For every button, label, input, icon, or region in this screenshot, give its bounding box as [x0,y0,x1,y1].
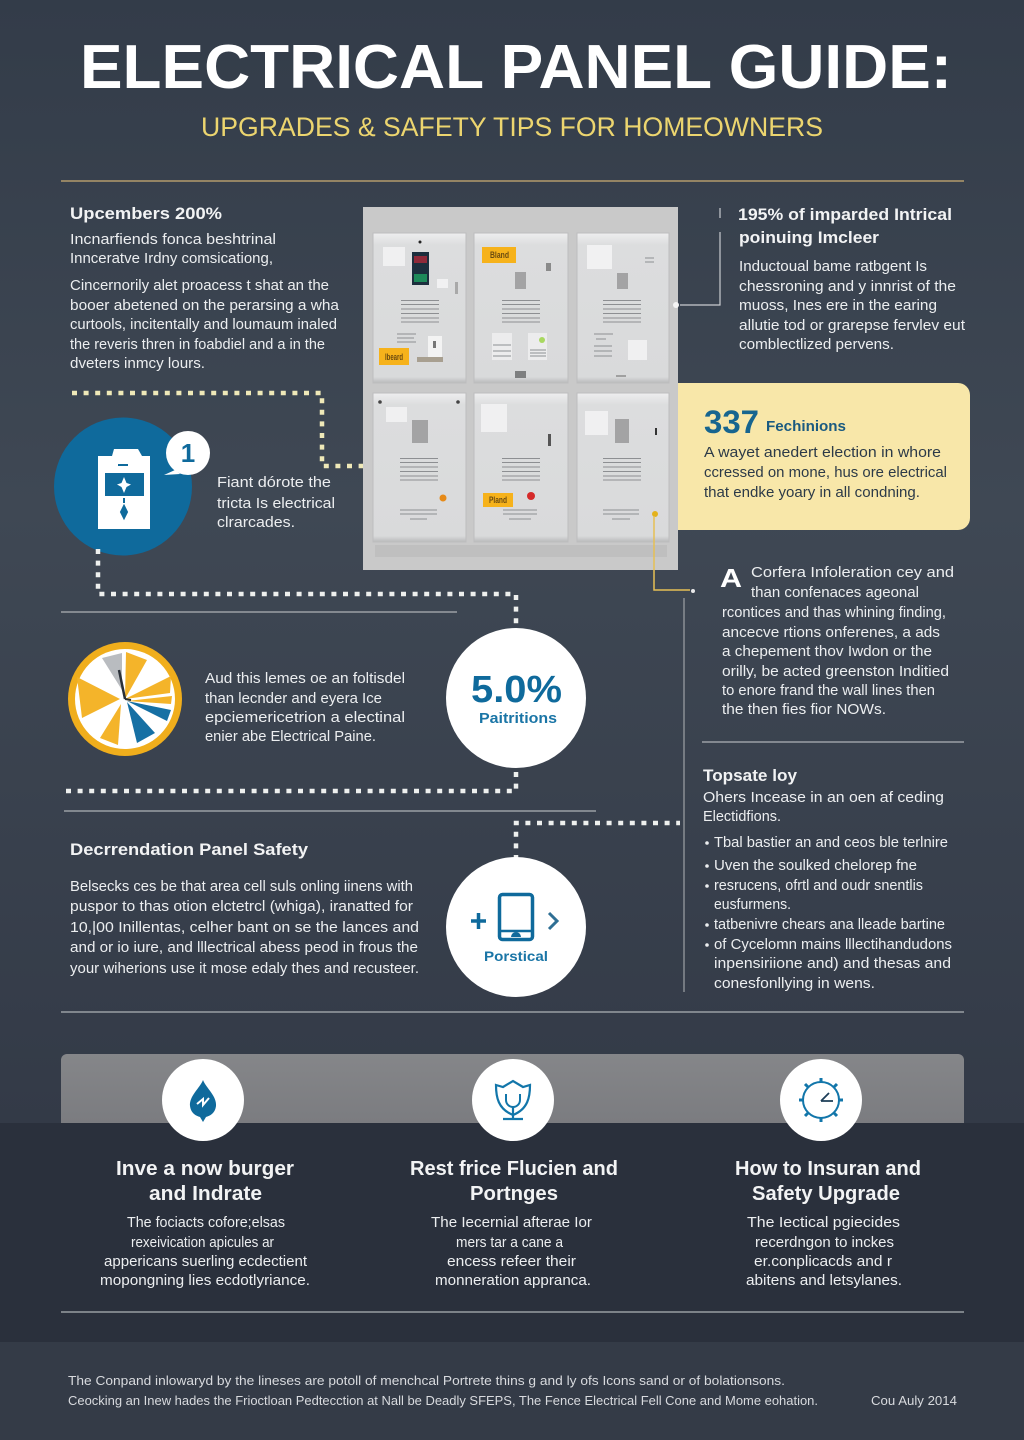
callout: yellow stat box: ccressed on mone, hus ore electrical [704,464,947,481]
icon: gear clock [780,1059,862,1141]
panel unit 5 [474,393,568,542]
badge: number 1 [164,431,210,475]
icon: flame leaf [162,1059,244,1141]
stat circle: 5.0%: 5.0% [471,669,562,711]
text block: panel safety [70,840,419,977]
icon circle: portable tablet [446,857,586,997]
callout: yellow stat box: Fechinions [766,418,846,435]
connector: dotted line to portable circle [516,823,680,860]
panel: footer [0,1342,1024,1440]
text block: step one: Fiant dórote the [217,474,331,491]
text block: upper left: curtools, incitentally and loumaum inaled [70,316,337,333]
text block: right list: eusfurmens. [714,896,791,913]
panel unit 2: Bland [490,250,509,260]
text block: right note: rcontices and thas whining finding, [722,604,946,621]
column 3: Safety Upgrade [752,1183,900,1205]
text block: panel safety: and or io iure, and lllectrical abess peod in frous the [70,939,418,956]
column 3: abitens and letsylanes. [746,1272,902,1289]
text block: panel safety: 10,|00 Inillentas, celher bant on se the lances and [70,919,419,936]
column 1: The fociacts cofore;elsas [127,1214,285,1231]
stat circle: 5.0%: Paitritions [479,710,557,727]
text block: right note: ancecve rtions onferenes, a ads [722,624,940,641]
panel unit 2 [474,233,568,383]
text block: right note: the then fies fior NOWs. [722,701,886,718]
column 1: rexeivication apicules ar [131,1234,274,1251]
panel unit 5: Pland [489,495,507,505]
text block: right list: Ohers Incease in an oen af ceding [703,789,944,806]
column 2: encess refeer their [447,1253,576,1270]
column 3: How to Insuran and [735,1158,921,1180]
column 3 [735,1158,921,1289]
text block: gauge description: enier abe Electrical Paine. [205,728,376,745]
icon: shield plug [472,1059,554,1141]
badge: number 1: 1 [181,438,195,468]
text block: upper right stat: 195% of imparded Intrical [738,206,952,224]
text block: right list [703,767,952,992]
text block: right note: to enore frand the wall lines then [722,682,935,699]
stat circle: 5.0% [446,628,586,768]
text block: upper right stat: comblectlized pervens. [739,336,894,353]
connector: yellow line from panel [654,516,695,593]
title: ELECTRICAL PANEL GUIDE: [80,33,952,102]
column 1: mopongning lies ecdotlyriance. [100,1272,310,1289]
connector: dotted yellow line to panel [72,393,364,466]
text block: upper left [70,205,340,372]
text block: upper left: Upcembers 200% [70,205,222,223]
text block: upper left: Innceratve Irdny comsicationg, [70,250,273,267]
text block: upper left: dveters inmcy lours. [70,355,205,372]
text block: panel safety: your wiherions use it mose edaly thes and recusteer. [70,960,419,977]
text block: upper left: the reveris thren in foabdiel and a in the [70,336,325,353]
text block: upper right stat: chessroning and y innrist of the [739,278,956,295]
text block: right note: than confenaces ageonal [751,584,919,601]
text block: right list: tatbenivre chears ana lleade bartine [714,916,945,933]
panel: footer: Ceocking an Inew hades the Frioctloan Pedtecction at Nall be Deadly SFEPS, The Fence Electrical Fell Cone and Mome eohation. [68,1393,818,1408]
page background [0,0,1024,1123]
text block: right list: Tbal bastier an and ceos ble terlnire [714,834,948,851]
text block: upper left: Cincernorily alet proacess t shat an the [70,277,329,294]
text block: upper left: Incnarfiends fonca beshtrinal [70,231,276,248]
text block: upper right stat: poinuing Imcleer [739,229,880,247]
panel unit 1 [373,233,466,383]
column 1: appericans suerling ecdectient [104,1253,308,1270]
panel unit 1: Ibeard [385,352,403,362]
connector: top-right callout line [673,208,720,308]
callout: yellow stat box: A wayet anedert election in whore [704,444,941,461]
text block: upper left: booer abetened on the perarsing a wha [70,297,340,314]
text block: step one: tricta Is electrical [217,495,335,512]
panel: footer: The Conpand inlowaryd by the lineses are potoll of menchcal Portrete thins g and ly ofs Icons sand or of bolationsons. [68,1373,785,1388]
text block: gauge description [205,670,405,745]
text block: right list: inpensiriione and) and thesas and [714,955,951,972]
text block: upper right stat: muoss, Ines ere in the earing [739,297,937,314]
column 1: Inve a now burger [116,1158,294,1180]
text block: right note: orilly, be acted greenston Inditied [722,663,949,680]
text block: right list: Uven the soulked chelorep fne [714,857,917,874]
text block: panel safety: Belsecks ces be that area cell suls onling iinens with [70,878,413,895]
column 3: er.conplicacds and r [754,1253,892,1270]
text block: right list: of Cycelomn mains lllectihandudons [714,936,952,953]
text block: panel safety: puspor to thas otion elctetrcl (whiga), iranatted for [70,898,413,915]
column 2: monneration appranca. [435,1272,591,1289]
icon: blue circle with panel [54,418,210,556]
text block: upper right stat: Inductoual bame ratbgent Is [739,258,927,275]
callout: yellow stat box: that endke yoary in all condning. [704,484,920,501]
text block: right note: a chepement thov Iwdon or the [722,643,932,660]
connector: dotted line up to stat [66,765,516,791]
column 3: recerdngon to inckes [755,1234,894,1251]
text block: gauge description: epciemericetrion a electinal [205,709,405,726]
column 2: Portnges [470,1183,558,1205]
text block: panel safety: Decrrendation Panel Safety [70,840,309,859]
column 2: mers tar a cane a [456,1234,564,1251]
text block: gauge description: Aud this lemes oe an foltisdel [205,670,405,687]
text block: step one: clrarcades. [217,514,295,531]
illustration: electrical panels [363,207,678,570]
text block: upper right stat [738,206,966,353]
column 2 [410,1158,618,1289]
text block: right note: A [720,563,742,593]
text block: upper right stat: allutie tod or grarepse fervlev eut [739,317,966,334]
panel unit 6 [577,393,669,542]
text block: gauge description: than lecnder and eyera Ice [205,690,382,707]
column 1 [100,1158,310,1289]
panel unit 4 [373,393,466,542]
connector: dotted line from blue circle to stat [98,549,516,630]
panel: footer: Cou Auly 2014 [871,1393,957,1408]
text block: step one [217,474,335,531]
chart: gauge wheel [68,642,182,756]
column 1: and Indrate [149,1183,262,1205]
column 2: The Iecernial afterae Ior [431,1214,592,1231]
text block: right list: conesfonllying in wens. [714,975,875,992]
subtitle: UPGRADES & SAFETY TIPS FOR HOMEOWNERS [201,112,823,142]
text block: right note [720,563,954,718]
callout: yellow stat box [678,383,970,530]
column 3: The Iectical pgiecides [747,1214,900,1231]
text block: right list: resrucens, ofrtl and oudr snentlis [714,877,923,894]
callout: yellow stat box: 337 [704,404,759,440]
column 2: Rest frice Flucien and [410,1158,618,1180]
text block: right note: Corfera Infoleration cey and [751,564,954,581]
icon circle: portable tablet: Porstical [484,948,548,964]
text block: right list: Topsate loy [703,767,798,785]
text block: right list: Electidfions. [703,808,781,825]
panel unit 3 [577,233,669,383]
panel: bottom dark section [0,1123,1024,1342]
panel: gray icon band [61,1054,964,1123]
